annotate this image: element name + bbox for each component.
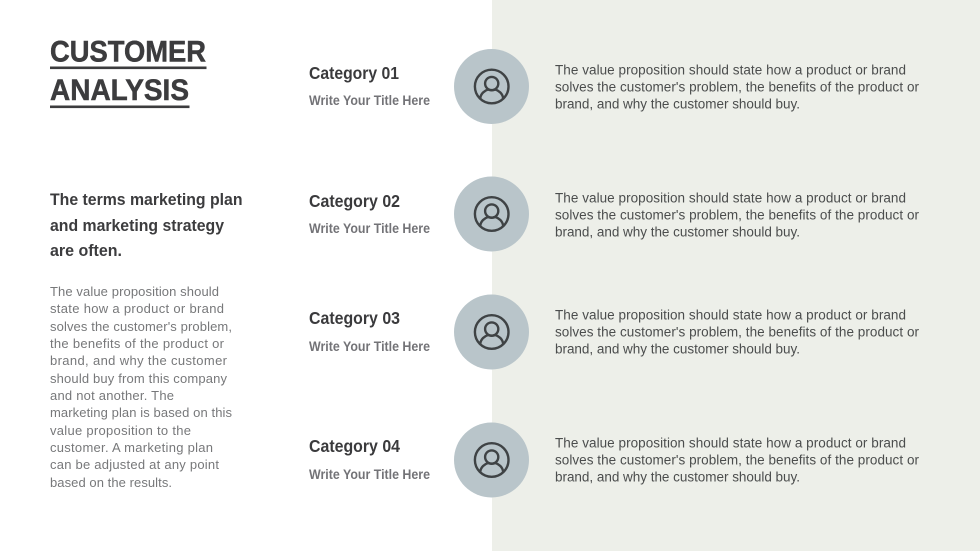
description (555, 308, 920, 356)
category 02 labels: Category 02 (309, 191, 400, 211)
icon: person in circle (454, 49, 529, 124)
body paragraph: The value proposition should (50, 284, 219, 299)
category 02 labels: Write Your Title Here (309, 221, 430, 236)
body paragraph: marketing plan is based on this (50, 405, 232, 420)
body paragraph: the benefits of the product or (50, 336, 225, 351)
description: The value proposition should state how a product or brand (555, 190, 906, 206)
background panel (492, 0, 980, 551)
body paragraph: state how a product or brand (50, 301, 224, 316)
subheading: are often. (50, 241, 122, 260)
category 01 labels (309, 63, 430, 108)
row: category 04 (309, 422, 920, 498)
description: solves the customer's problem, the benefits of the product or (555, 80, 920, 94)
description (555, 62, 920, 112)
category 01 labels: Write Your Title Here (309, 93, 430, 108)
row: category 01 (309, 49, 920, 124)
body paragraph: brand, and why the customer (50, 353, 228, 368)
category 04 labels (309, 436, 430, 482)
description: solves the customer's problem, the benefits of the product or (555, 324, 920, 340)
description: brand, and why the customer should buy. (555, 224, 800, 240)
description (555, 190, 920, 240)
category 03 labels (309, 308, 430, 354)
description: The value proposition should state how a product or brand (555, 436, 906, 450)
description: solves the customer's problem, the benefits of the product or (555, 208, 920, 222)
subheading: The terms marketing plan (50, 190, 242, 209)
title (50, 36, 206, 108)
title: CUSTOMER (50, 36, 206, 68)
description: The value proposition should state how a product or brand (555, 62, 906, 78)
description: brand, and why the customer should buy. (555, 470, 800, 484)
title: ANALYSIS (50, 74, 189, 107)
icon: person in circle (454, 294, 529, 370)
body paragraph: can be adjusted at any point (50, 457, 219, 472)
description: brand, and why the customer should buy. (555, 342, 800, 356)
body paragraph: and not another. The (50, 388, 174, 403)
description: brand, and why the customer should buy. (555, 96, 800, 112)
body paragraph: value proposition to the (50, 423, 191, 438)
row: category 03 (309, 294, 920, 370)
subheading: and marketing strategy (50, 216, 225, 235)
icon: person in circle (454, 422, 529, 498)
body paragraph: based on the results. (50, 475, 172, 490)
category 03 labels: Category 03 (309, 308, 400, 328)
row: category 02 (309, 176, 920, 252)
body paragraph: solves the customer's problem, (50, 319, 232, 334)
body paragraph: customer. A marketing plan (50, 440, 213, 455)
icon: person in circle (454, 176, 529, 252)
body paragraph: should buy from this company (50, 371, 228, 386)
subheading (50, 190, 242, 260)
description: solves the customer's problem, the benefits of the product or (555, 452, 920, 468)
category 03 labels: Write Your Title Here (309, 339, 430, 354)
category 04 labels: Category 04 (309, 436, 400, 456)
category 04 labels: Write Your Title Here (309, 467, 430, 482)
category 02 labels (309, 191, 430, 236)
description: The value proposition should state how a product or brand (555, 308, 906, 322)
body paragraph (50, 284, 232, 490)
category 01 labels: Category 01 (309, 63, 399, 83)
description (555, 436, 920, 484)
